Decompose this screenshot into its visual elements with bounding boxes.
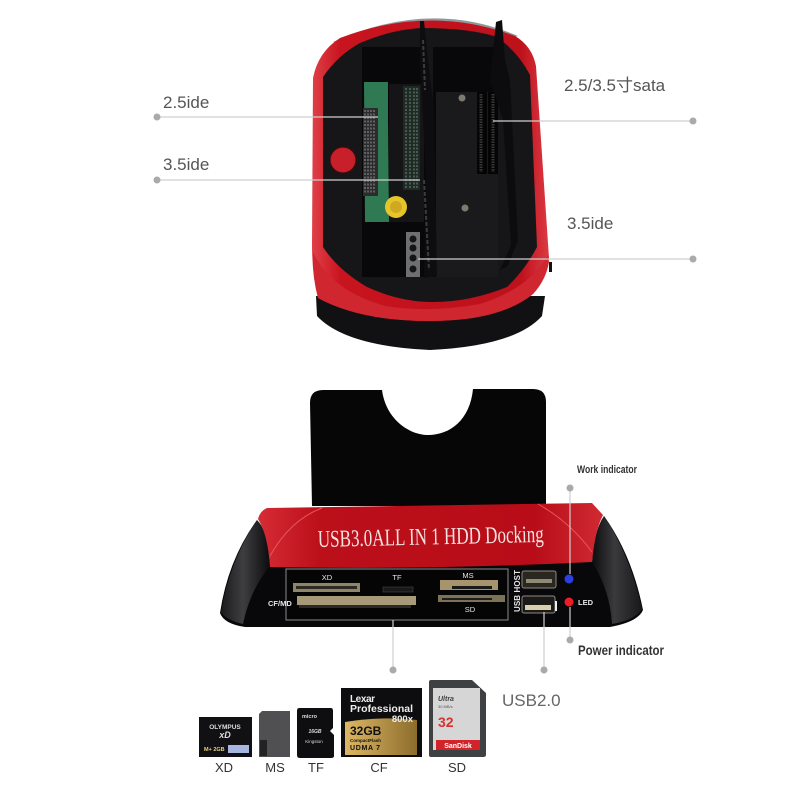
dock base underside [316, 296, 545, 350]
card slot box: SD [465, 605, 476, 614]
card slot box [268, 569, 508, 620]
callout: 3.5ide right: 3.5ide [567, 214, 613, 233]
card: XD [199, 717, 252, 775]
usb ports [522, 571, 557, 613]
card: CF: 800x [392, 714, 414, 725]
card: XD: OLYMPUS [209, 724, 241, 731]
card: CF [341, 688, 422, 775]
card slot box: MS [462, 571, 474, 580]
right bay [433, 47, 498, 277]
card: TF [297, 708, 334, 775]
callout: 3.5ide left [154, 155, 420, 184]
red button [330, 147, 356, 173]
card slot box: XD [322, 573, 333, 582]
card: CF: UDMA 7 [350, 745, 380, 752]
card: XD: XD [215, 760, 233, 775]
card: CF: CompactFlash [350, 738, 381, 743]
callout: 3.5ide left: 3.5ide [163, 155, 209, 174]
left latch [420, 21, 437, 278]
callout: power indicator: Power indicator [578, 642, 664, 658]
black back plate with notch [310, 389, 546, 506]
black top panel [323, 28, 537, 302]
card: MS: MS [265, 760, 285, 775]
card: CF: 32GB [350, 724, 382, 738]
callout: work indicator: Work indicator [577, 464, 638, 476]
band title: USB3.0ALL IN 1 HDD Docking [318, 522, 544, 553]
callout: 2.5ide [154, 93, 378, 120]
card: CF: Lexar [350, 694, 375, 705]
card: SD: SanDisk [444, 743, 472, 750]
callout: power indicator [566, 607, 664, 658]
card slot box: TF [392, 573, 402, 582]
callout lines top [154, 76, 696, 262]
card: SD: 30 MB/s [438, 704, 453, 709]
callout: 3.5ide right [418, 214, 696, 262]
device: front view dock [220, 389, 643, 627]
red band [258, 503, 603, 568]
right wing [592, 516, 642, 624]
left wing [221, 520, 270, 624]
led indicators [564, 574, 594, 607]
card slot box: CF/MD [268, 599, 292, 608]
ide connector 3.5 [403, 86, 420, 190]
card: TF: Kingston [305, 739, 323, 744]
callout: 2.5ide: 2.5ide [163, 93, 209, 112]
card: SD [429, 680, 486, 775]
card: SD: 32 [438, 714, 454, 730]
yellow sticker [385, 196, 407, 218]
power connector [406, 232, 420, 277]
callout: card slots pointer [390, 620, 396, 674]
card: TF: 16GB [308, 729, 322, 735]
led indicators: LED [578, 598, 594, 607]
callout: 2.5/3.5 sata: 2.5/3.5寸sata [564, 76, 666, 95]
card: SD: SD [448, 760, 466, 775]
card: CF: Professional [350, 704, 413, 715]
right latch [490, 20, 518, 270]
usb host label: USB HOST [513, 570, 522, 612]
left bay [362, 47, 426, 277]
card: CF: CF [370, 760, 388, 775]
card: MS [259, 711, 290, 775]
label: USB2.0: USB2.0 [502, 691, 561, 710]
card: XD: xD [218, 730, 231, 740]
red shell [312, 20, 549, 321]
card: XD: M+ 2GB [204, 747, 225, 753]
card: TF: TF [308, 760, 324, 775]
base silhouette [220, 516, 643, 627]
slots [293, 583, 360, 592]
sata connectors [477, 92, 487, 174]
green circuit board [364, 82, 389, 222]
callout: 2.5/3.5 sata [493, 76, 696, 124]
callout: usb pointer [540, 612, 548, 674]
grey rim [333, 18, 518, 44]
callout: work indicator [566, 464, 638, 574]
card: SD: Ultra [438, 696, 454, 703]
ide connector 2.5 [363, 108, 378, 196]
card: TF: micro [302, 714, 318, 720]
device: top view dock [312, 18, 552, 350]
